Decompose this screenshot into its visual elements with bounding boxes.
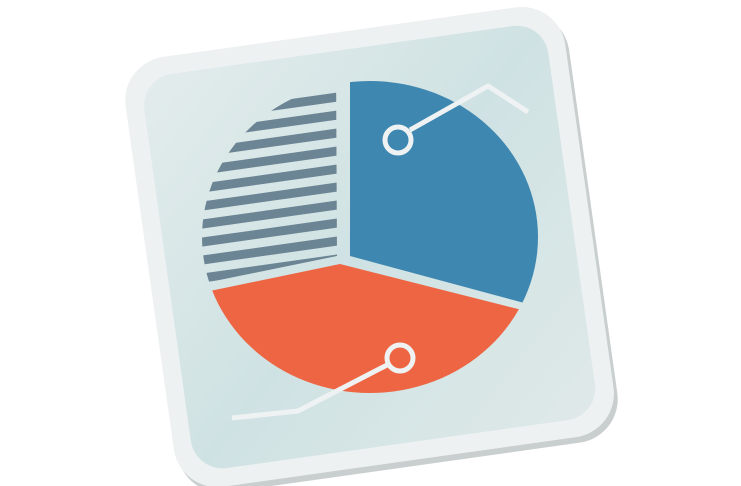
line marker: upper [385,86,528,153]
slice: orange [212,264,519,393]
pie chart [202,81,538,393]
slice: striped gray [202,92,337,282]
line marker: lower [232,345,413,418]
slice: blue [350,81,538,302]
app icon illustration [125,7,618,486]
icon frame [120,1,623,486]
